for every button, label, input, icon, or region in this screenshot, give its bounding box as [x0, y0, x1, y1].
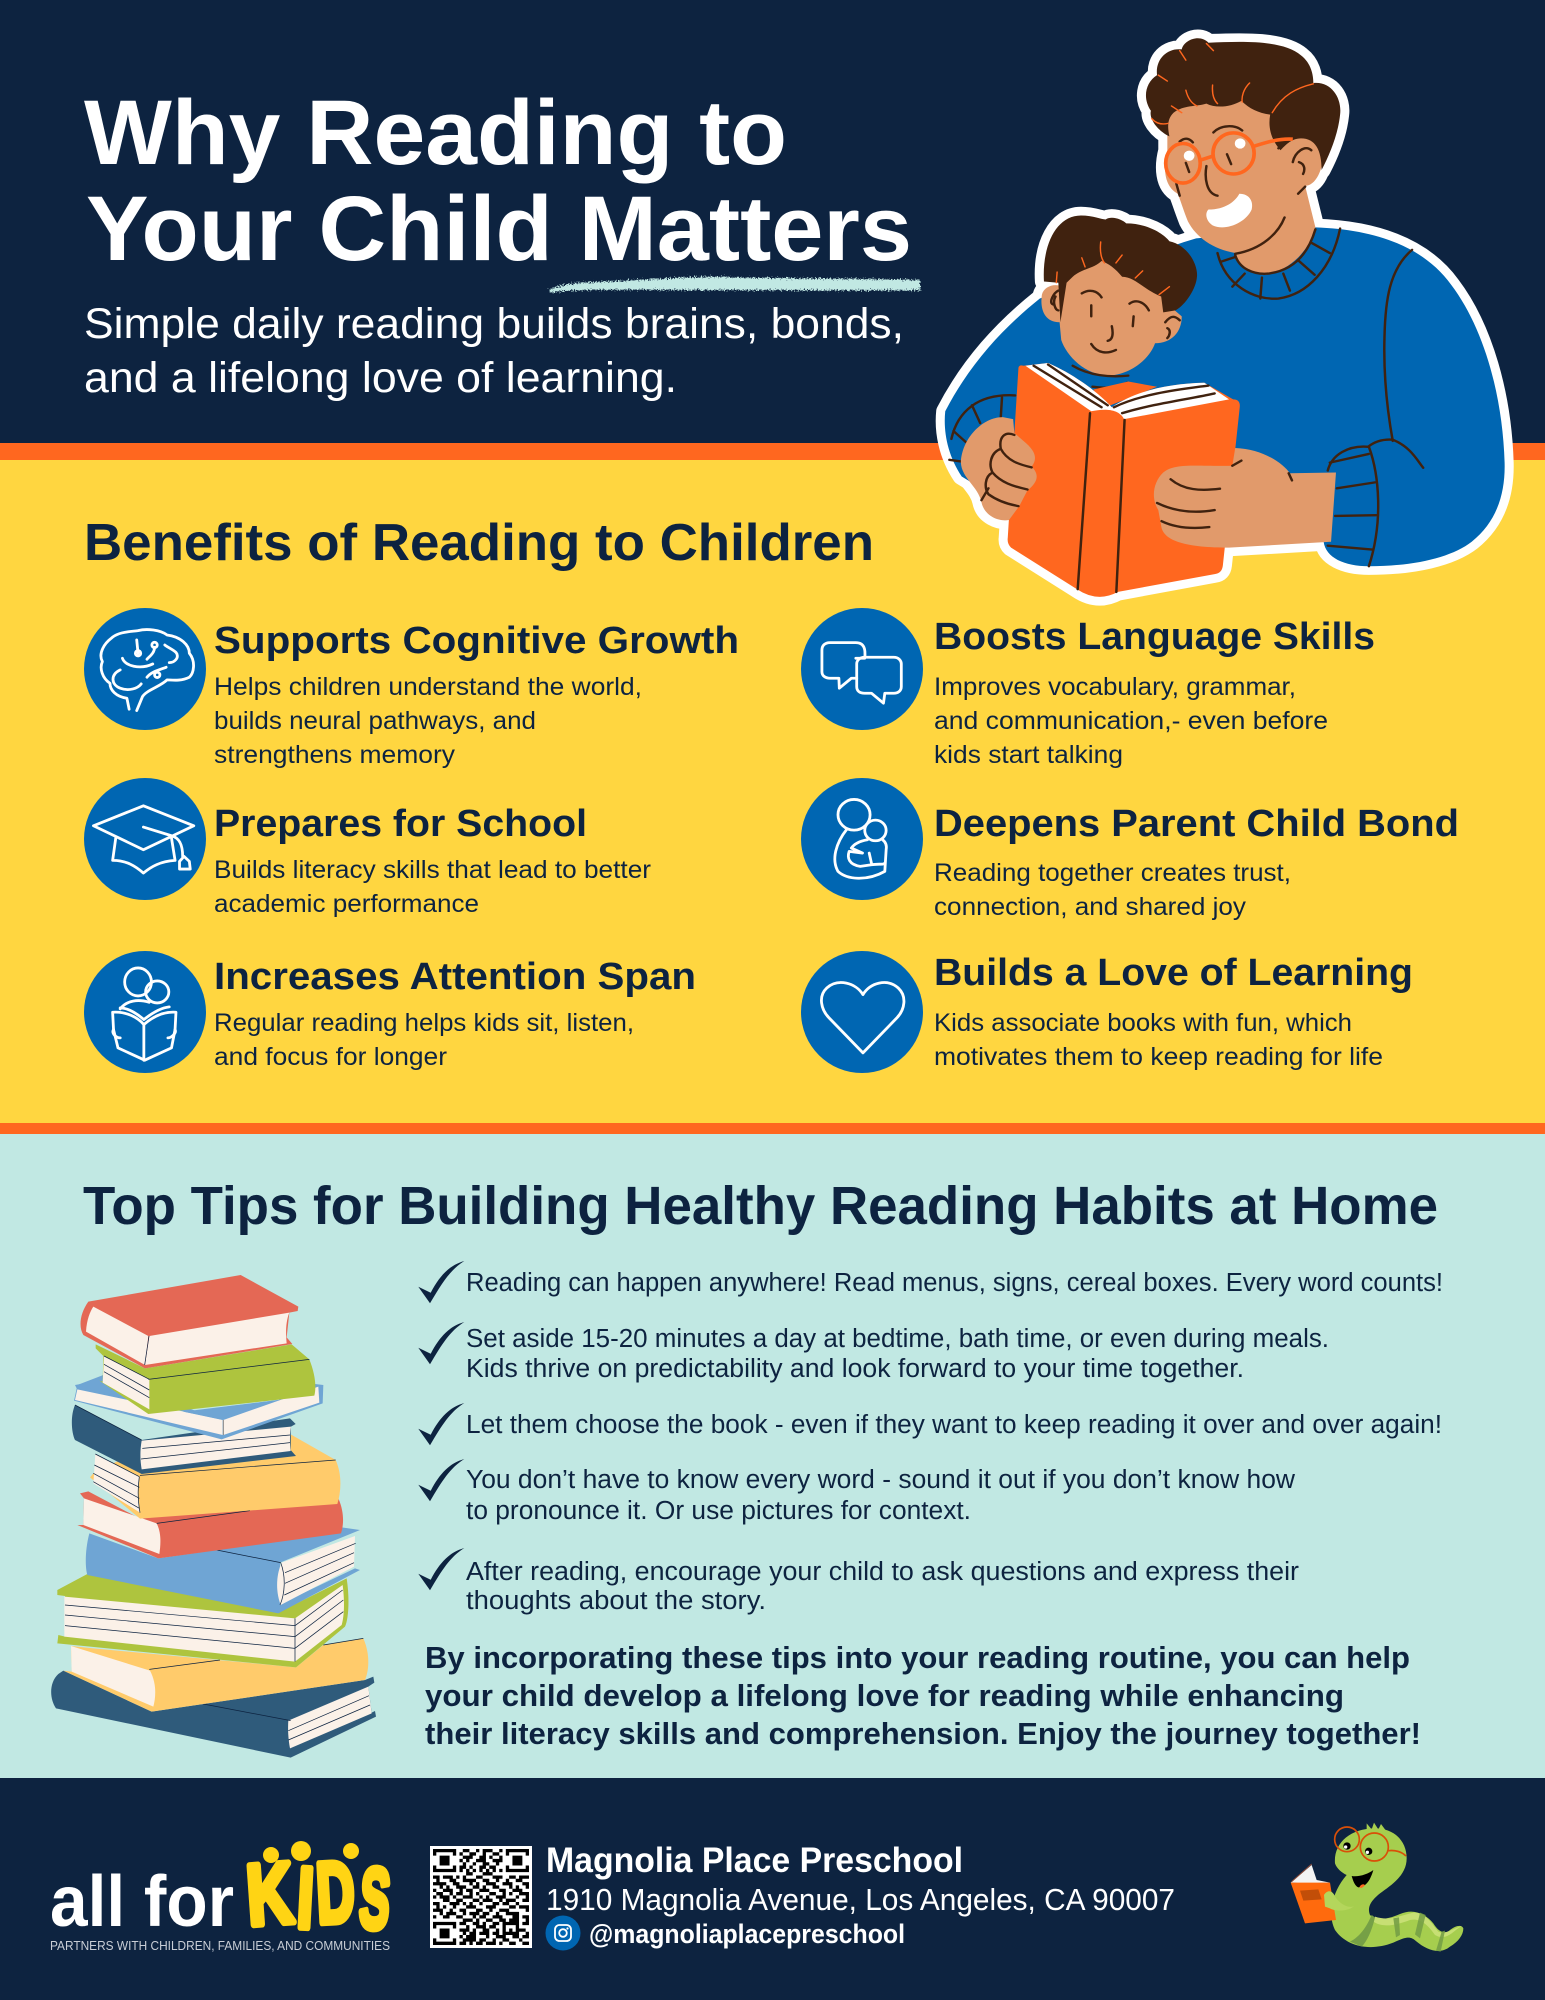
tip 5: After reading, encourage your child to ask questions and express their: [466, 1558, 1300, 1586]
illustration: father and child reading: [945, 38, 1505, 597]
sweater lines: [949, 229, 1423, 566]
logo: all for kids: I: [295, 1850, 316, 1947]
heading: tips: Top Tips for Building Healthy Reading Habits at Home: [83, 1176, 1438, 1236]
tip 1: [418, 1261, 1443, 1303]
QR code: [430, 1846, 532, 1948]
worm glasses: [1335, 1827, 1406, 1861]
benefit: boosts language skills: [801, 608, 1375, 769]
title: Your Child Matters: [86, 178, 912, 280]
benefit: builds a love of learning: Kids associate books with fun, which: [934, 1009, 1352, 1037]
glasses: [1166, 133, 1293, 183]
icon: brain: [84, 608, 206, 730]
logo: all for kids: K: [244, 1845, 296, 1944]
benefit: increases attention span: Regular reading helps kids sit, listen,: [214, 1009, 634, 1037]
subtitle: Simple daily reading builds brains, bonds,: [84, 300, 904, 348]
benefit: boosts language skills: Boosts Language Skills: [934, 616, 1375, 658]
icon: speech bubbles: [801, 608, 923, 730]
icon: graduation cap: [84, 778, 206, 900]
brush underline: [549, 277, 920, 293]
worm eyes: [1343, 1842, 1372, 1855]
contact details: 1910 Magnolia Avenue, Los Angeles, CA 90007: [546, 1882, 1175, 1917]
icon: instagram: [546, 1916, 580, 1950]
benefits panel background: [0, 460, 1545, 1123]
icon: heart: [801, 951, 923, 1073]
logo: all for kids: [50, 1841, 393, 1953]
benefit: prepares for school: [84, 778, 651, 918]
benefit: builds a love of learning: [801, 951, 1413, 1073]
benefit: boosts language skills: Improves vocabulary, grammar,: [934, 673, 1296, 701]
benefit: deepens parent child bond: [801, 778, 1459, 921]
illustration: stack of books: [51, 1275, 376, 1758]
tip 5: [418, 1548, 1300, 1615]
mascot: bookworm with glasses: [1291, 1823, 1463, 1952]
tip 4: You don’t have to know every word - sound it out if you don’t know how: [466, 1466, 1296, 1494]
closing statement: By incorporating these tips into your reading routine, you can help: [425, 1640, 1410, 1675]
child: [1041, 253, 1182, 376]
logo: all for kids: D: [314, 1844, 357, 1942]
tip 4: to pronounce it. Or use pictures for context.: [466, 1497, 971, 1525]
father's face: [1165, 91, 1324, 275]
subtitle: [84, 300, 904, 402]
logo: all for kids: PARTNERS WITH CHILDREN, FAMILIES, AND COMMUNITIES: [50, 1939, 390, 1953]
logo: all for kids: S: [357, 1850, 393, 1948]
tip 3: [418, 1403, 1442, 1445]
tip 2: Kids thrive on predictability and look forward to your time together.: [466, 1355, 1244, 1383]
benefit: increases attention span: [84, 951, 696, 1073]
orange divider top: [0, 443, 1545, 460]
subtitle: and a lifelong love of learning.: [84, 354, 677, 402]
contact details: Magnolia Place Preschool: [546, 1841, 963, 1880]
tip 1: Reading can happen anywhere! Read menus, signs, cereal boxes. Every word counts!: [466, 1269, 1443, 1297]
icon: parent and child: [801, 778, 923, 900]
benefit: increases attention span: Increases Attention Span: [214, 956, 696, 998]
title: Why Reading to: [84, 82, 787, 184]
benefit: prepares for school: academic performance: [214, 890, 479, 918]
benefit: supports cognitive growth: Supports Cognitive Growth: [214, 620, 739, 662]
benefit: builds a love of learning: Builds a Love of Learning: [934, 952, 1413, 994]
orange divider middle: [0, 1123, 1545, 1134]
closing statement: your child develop a lifelong love for reading while enhancing: [425, 1678, 1344, 1713]
tip 5: thoughts about the story.: [466, 1587, 766, 1615]
icon: child reading: [84, 951, 206, 1073]
contact details: @magnoliaplacepreschool: [589, 1919, 905, 1949]
closing statement: [425, 1640, 1421, 1751]
tip 4: [418, 1459, 1296, 1525]
tips panel background: [0, 1134, 1545, 1778]
footer band: [0, 1778, 1545, 2000]
benefit: deepens parent child bond: Reading together creates trust,: [934, 859, 1291, 887]
benefit: prepares for school: Builds literacy skills that lead to better: [214, 856, 651, 884]
title: [84, 82, 912, 280]
heading: benefits: Benefits of Reading to Children: [84, 514, 874, 572]
benefit: deepens parent child bond: connection, and shared joy: [934, 893, 1247, 921]
tip 2: Set aside 15-20 minutes a day at bedtime, bath time, or even during meals.: [466, 1325, 1329, 1353]
benefit: supports cognitive growth: strengthens memory: [214, 741, 456, 769]
benefit: increases attention span: and focus for longer: [214, 1043, 447, 1071]
benefit: boosts language skills: and communication,- even before: [934, 707, 1328, 735]
tip 2: [418, 1322, 1329, 1383]
closing statement: their literacy skills and comprehension. Enjoy the journey together!: [425, 1716, 1421, 1751]
benefit: boosts language skills: kids start talking: [934, 741, 1123, 769]
logo: all for kids: all for: [50, 1862, 234, 1942]
hands: [961, 417, 1037, 520]
benefit: builds a love of learning: motivates them to keep reading for life: [934, 1043, 1383, 1071]
tip 3: Let them choose the book - even if they want to keep reading it over and over again!: [466, 1411, 1442, 1439]
tips checklist: [418, 1261, 1443, 1615]
open book: [1008, 363, 1240, 597]
benefit: supports cognitive growth: Helps children understand the world,: [214, 673, 642, 701]
benefit: supports cognitive growth: [84, 608, 739, 769]
contact details: [546, 1841, 1175, 1949]
benefit: deepens parent child bond: Deepens Parent Child Bond: [934, 803, 1459, 845]
benefit: prepares for school: Prepares for School: [214, 803, 587, 845]
header band: [0, 0, 1545, 443]
benefit: supports cognitive growth: builds neural pathways, and: [214, 707, 536, 735]
